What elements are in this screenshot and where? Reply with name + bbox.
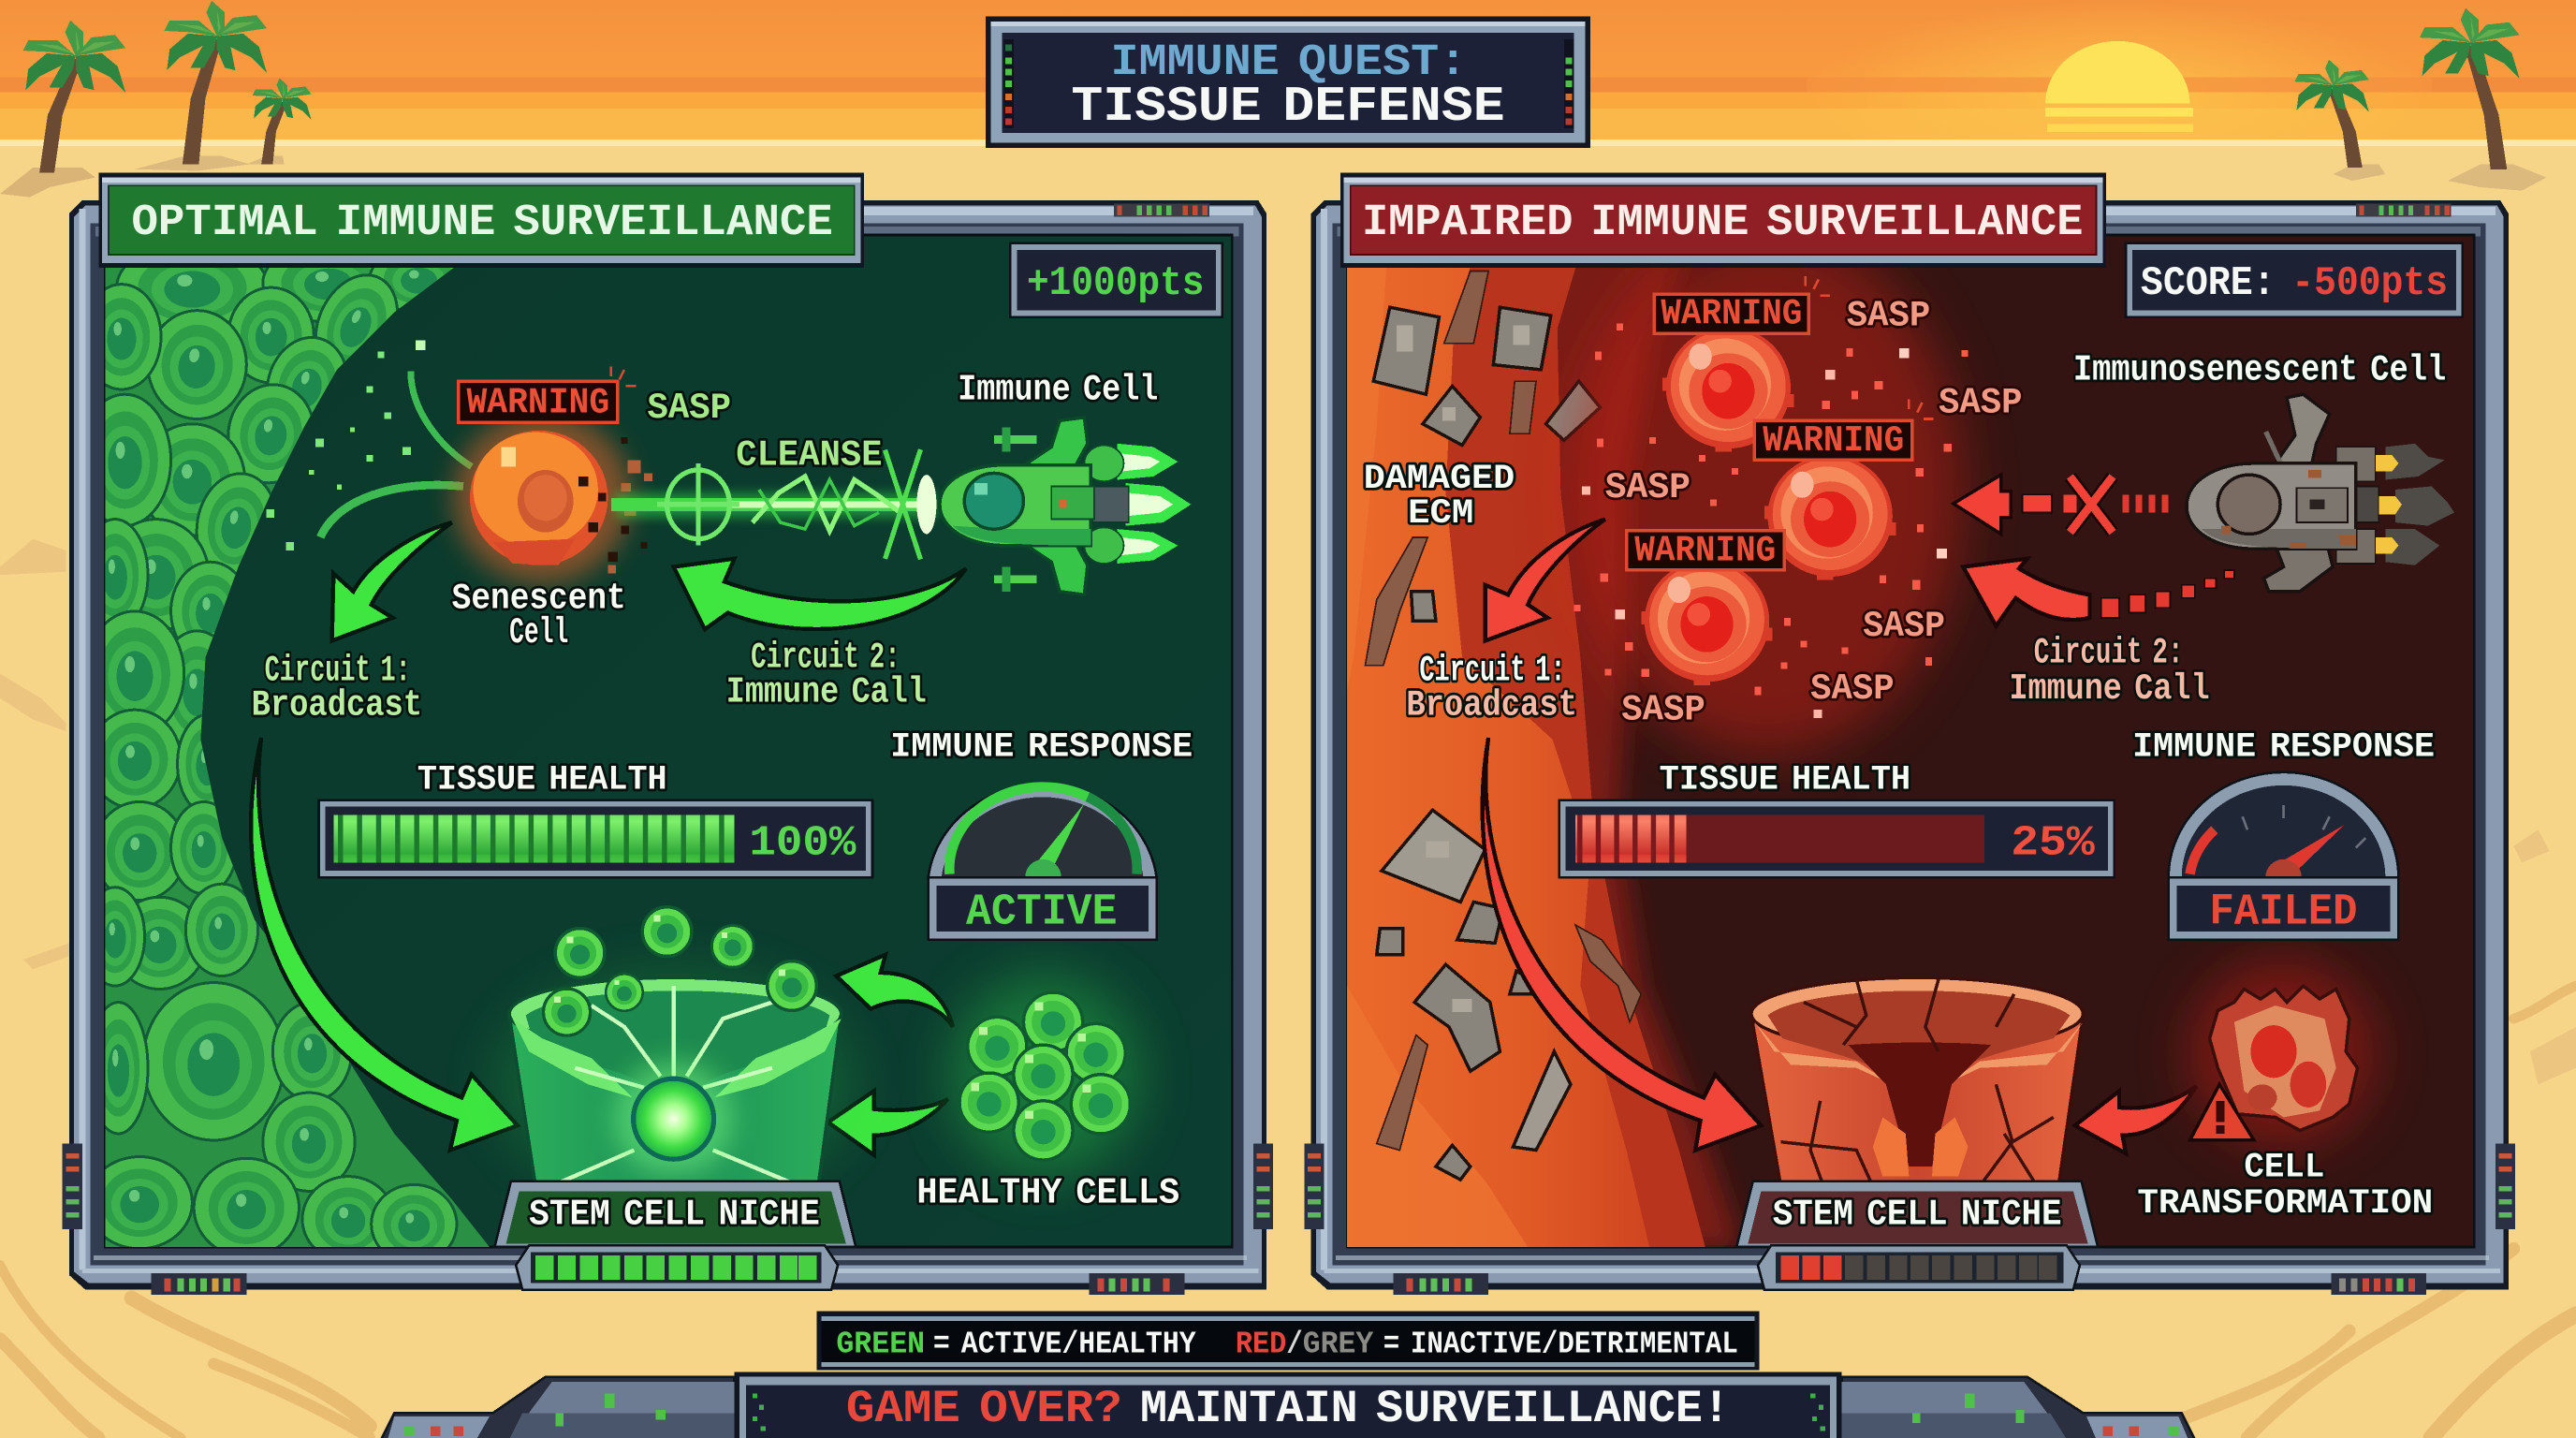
sun (2045, 41, 2193, 132)
label: healthy cells: HEALTHY CELLS (916, 1173, 1179, 1214)
console wing: left (381, 1377, 735, 1438)
score badge: -500pts: -500pts (2291, 260, 2448, 307)
gauge: active: ACTIVE (966, 888, 1117, 937)
niche energy meter (1758, 1245, 2080, 1290)
stem cells emerging (544, 907, 816, 1035)
label: circuit 2 immune call (2009, 632, 2210, 710)
arrow: circuit 1 (1486, 520, 1605, 640)
SASP labels: SASP (1939, 383, 2022, 424)
label: immune response: IMMUNE RESPONSE (2132, 727, 2435, 767)
label: immunosenescent cell: Immunosenescent Cell (2073, 349, 2446, 390)
label: cleanse: CLEANSE (736, 435, 883, 477)
title line 1: IMMUNE QUEST: (1110, 38, 1467, 88)
label: immune response: IMMUNE RESPONSE (890, 727, 1193, 767)
transformed cell (2190, 961, 2374, 1145)
panel frame (1305, 200, 2515, 1295)
label: SASP: SASP (648, 388, 731, 429)
immunosenescent spaceship (2187, 394, 2454, 592)
arrow: circuit 2 broken (1963, 559, 2234, 626)
arrow: healthy cells upper (836, 955, 953, 1027)
warning tag 2: WARNING (1763, 420, 1904, 462)
health bar: 100% (319, 800, 872, 877)
health bar: 25% (1559, 800, 2115, 877)
stem cell niche label: STEM CELL NICHE (529, 1194, 820, 1235)
SASP labels: SASP (1621, 690, 1705, 731)
SASP labels: SASP (1605, 467, 1690, 508)
label: circuit 1 broadcast (1406, 651, 1577, 726)
label: circuit 1 broadcast: Broadcast (1406, 684, 1577, 726)
arrow: broadcast to niche (251, 738, 518, 1151)
label: circuit 1 broadcast (252, 651, 422, 726)
panel heading: optimal (98, 172, 864, 268)
score badge: -500pts: SCORE: (2141, 260, 2276, 307)
panel: impaired immune surveillance (1305, 172, 2515, 1295)
label: immune cell: Immune Cell (958, 369, 1158, 410)
stem cell niche: damaged vessel (1751, 977, 2083, 1186)
palm tree 5 (2420, 8, 2546, 191)
stem cell niche label: STEM CELL NICHE (1773, 1194, 2062, 1235)
arrow: circuit 2 (674, 559, 966, 629)
label: damaged ECM: ECM (1408, 494, 1473, 534)
title line 2: TISSUE DEFENSE (1071, 79, 1505, 135)
warning tag: WARNING (466, 383, 609, 424)
label: tissue health: TISSUE HEALTH (1660, 760, 1910, 800)
legend bar: / (1286, 1327, 1303, 1362)
label: circuit 1 broadcast: Circuit 1: (265, 651, 411, 692)
arrow: broadcast to niche (1483, 738, 1761, 1151)
game over banner: GAME OVER? (846, 1383, 1122, 1435)
palm tree 1 (0, 21, 125, 198)
label: circuit 2 immune call: Circuit 2: (2034, 632, 2183, 673)
senescent cell: upper (1662, 324, 1794, 452)
SASP labels (1605, 295, 2022, 731)
senescent cell (453, 413, 631, 583)
senescent cell: lower (1641, 557, 1773, 685)
immune cell spaceship (940, 418, 1191, 594)
game over banner (735, 1372, 1841, 1438)
panel: optimal immune surveillance (63, 172, 1273, 1295)
label: damaged ECM: DAMAGED (1364, 460, 1515, 499)
stem cell niche label (494, 1181, 856, 1247)
label: senescent cell: Senescent (452, 578, 626, 619)
score badge: -500pts (2126, 243, 2463, 317)
label: circuit 2 immune call: Immune Call (2009, 668, 2210, 710)
legend bar: = ACTIVE/HEALTHY (933, 1327, 1196, 1362)
legend bar: = INACTIVE/DETRIMENTAL (1383, 1327, 1738, 1362)
gauge: active (929, 785, 1157, 940)
label: damaged ECM (1364, 460, 1515, 534)
SASP labels: SASP (1847, 295, 1930, 336)
panel heading: impaired (1340, 172, 2106, 268)
console wing: right (1841, 1377, 2195, 1438)
screen (1347, 235, 2474, 1247)
score badge: +1000pts: +1000pts (1027, 260, 1204, 307)
arrow: healthy cells lower (828, 1091, 948, 1155)
rubble and debris (1365, 271, 1641, 1180)
legend bar: GREY (1303, 1327, 1373, 1362)
stem cell niche label (1736, 1181, 2098, 1247)
background: sunset sky (0, 0, 2576, 198)
label: circuit 1 broadcast: Circuit 1: (1419, 651, 1566, 692)
label: cell transformation (2137, 1149, 2433, 1224)
label: circuit 2 immune call: Circuit 2: (751, 638, 900, 679)
warning tag 3: WARNING (1634, 530, 1776, 571)
game over banner: MAINTAIN SURVEILLANCE! (1140, 1383, 1730, 1435)
cleanse laser beam (611, 448, 936, 560)
targeting reticle (657, 463, 739, 546)
senescent cell: middle (1764, 452, 1895, 580)
arrow: transformation to niche (2075, 1086, 2197, 1153)
legend bar: GREEN (836, 1327, 925, 1362)
legend bar: RED (1236, 1327, 1286, 1362)
legend bar (816, 1312, 1760, 1371)
label: cell transformation: CELL (2244, 1149, 2324, 1188)
label: circuit 1 broadcast: Broadcast (252, 684, 422, 726)
healthy cell cluster (949, 975, 1140, 1178)
health bar: 25%: 25% (2011, 819, 2095, 868)
score badge: +1000pts (1010, 243, 1222, 317)
warning tag 1: WARNING (1661, 294, 1802, 335)
damaged tissue wall (1347, 235, 1741, 1249)
label: senescent cell (452, 578, 626, 653)
panel frame (63, 200, 1273, 1295)
health bar: 100%: 100% (749, 819, 856, 868)
warning triangle icon (2190, 1084, 2254, 1140)
label: senescent cell: Cell (509, 612, 568, 653)
panel heading: optimal: OPTIMAL IMMUNE SURVEILLANCE (131, 198, 833, 248)
palm tree 2 (135, 1, 267, 171)
red SASP glow and particles (1569, 230, 1969, 756)
panel heading: impaired: IMPAIRED IMMUNE SURVEILLANCE (1362, 198, 2083, 248)
label: circuit 2 immune call: Immune Call (726, 671, 927, 712)
green tissue wall (105, 268, 490, 1247)
SASP labels: SASP (1863, 606, 1945, 647)
title plaque (986, 17, 1590, 148)
screen (105, 235, 1232, 1247)
label: tissue health: TISSUE HEALTH (417, 760, 667, 800)
niche energy meter (516, 1245, 838, 1290)
warning tag (459, 366, 636, 424)
green signal particles and arcs (266, 340, 472, 550)
palm tree 4 (2294, 60, 2385, 181)
SASP labels: SASP (1810, 668, 1895, 710)
arrow: circuit 1 (332, 522, 452, 640)
gauge: failed (2169, 772, 2398, 940)
blocked arrow with X (1954, 475, 2169, 534)
stem cell niche: healthy vessel (494, 969, 856, 1199)
label: cell transformation: TRANSFORMATION (2137, 1184, 2433, 1224)
warning tag 2 (1754, 399, 1934, 462)
dissolving cell debris (578, 437, 652, 574)
gauge: failed: FAILED (2210, 888, 2358, 937)
label: circuit 2 immune call (726, 638, 927, 712)
palm tree 3 (246, 79, 312, 165)
warning tag 1 (1654, 276, 1830, 335)
